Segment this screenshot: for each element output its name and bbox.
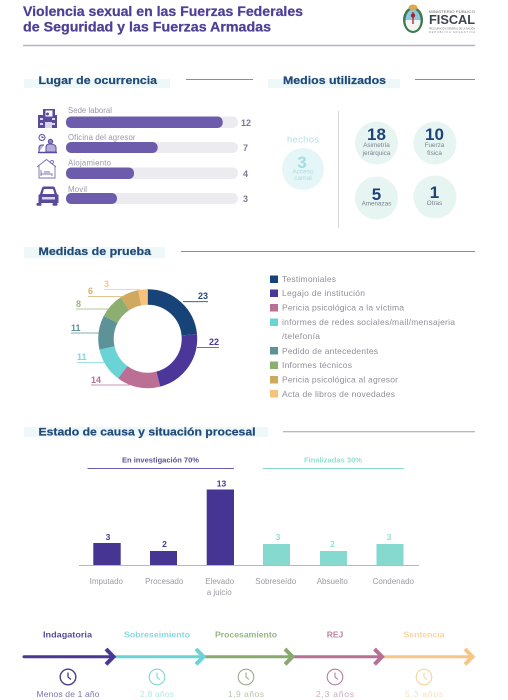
heading: Lugar de ocurrencia — [24, 75, 170, 88]
bar: Movil: 3 — [243, 194, 248, 204]
logo: Ministerio Público Fiscal: PROCURACIÓN GENERAL DE LA NACIÓN — [429, 26, 475, 30]
icon: coat of arms — [403, 4, 423, 33]
bar chart: situación procesal: Elevado — [205, 577, 235, 586]
circle: fuerza fisica — [414, 122, 456, 164]
title: de Seguridad y las Fuerzas Armadas — [23, 20, 271, 34]
stage: Sentencia: Sentencia — [404, 630, 445, 640]
circle: amenazas: 5 — [372, 185, 381, 204]
bar chart: situación procesal: Imputado — [90, 577, 124, 586]
bar chart: situación procesal: 3 — [106, 532, 111, 542]
legend: Pericia psicológica a la víctima — [282, 302, 404, 312]
group header: en investigacion: En investigación 70% — [122, 456, 200, 464]
group header: finalizadas: Finalizadas 30% — [304, 456, 363, 464]
donut value labels: 22 — [209, 337, 219, 347]
legend: /telefonía — [282, 331, 320, 341]
bar: Alojamiento — [66, 158, 248, 179]
legend — [270, 274, 455, 399]
bar: Sede laboral — [66, 106, 251, 128]
legend: informes de redes sociales/mail/mensajeria — [282, 317, 455, 327]
stage: Indagatoria: Menos de 1 año — [36, 689, 100, 699]
donut value labels: 3 — [104, 279, 109, 289]
bar chart: situación procesal: Procesado — [145, 577, 184, 586]
stage: Indagatoria: Indagatoria — [43, 630, 92, 640]
stage: Sobreseimiento: 2,8 años — [140, 689, 174, 699]
stage: Sobreseimiento — [124, 630, 190, 699]
bar: Alojamiento: 4 — [243, 169, 248, 179]
circle: amenazas — [355, 176, 398, 220]
donut value labels: 23 — [198, 291, 208, 301]
bar: Movil: Movil — [68, 185, 87, 194]
icon: car — [36, 186, 58, 206]
donut value labels: 6 — [88, 286, 93, 296]
circle: acceso carnal: Acceso — [292, 168, 314, 176]
stage: Procesamiento: Procesamiento — [215, 630, 277, 640]
logo: Ministerio Público Fiscal: FISCAL — [429, 13, 475, 27]
donut chart — [71, 279, 219, 385]
legend: Pericia psicológica al agresor — [282, 374, 398, 384]
timeline — [24, 630, 472, 699]
icon: office with clock — [38, 134, 57, 152]
circle: acceso carnal: carnal — [294, 175, 312, 182]
bar: Sede laboral: 12 — [241, 118, 251, 128]
stage: Procesamiento — [215, 630, 277, 699]
bar chart: situación procesal — [79, 456, 419, 597]
circle: otras: Otras — [427, 200, 442, 207]
icon: house — [37, 160, 56, 178]
donut value labels: 14 — [91, 375, 101, 385]
circle: acceso carnal: 3 — [297, 153, 307, 172]
stage: REJ: 2,3 años — [316, 689, 354, 699]
donut value labels — [71, 279, 219, 385]
logo: Ministerio Público Fiscal — [403, 4, 475, 34]
legend: Testimoniales — [282, 274, 336, 284]
bar: Sede laboral: Sede laboral — [68, 106, 112, 115]
heading: Lugar de ocurrencia: Lugar de ocurrencia — [38, 75, 158, 87]
donut value labels: 11 — [77, 352, 87, 362]
icon: office building — [38, 109, 57, 128]
bar chart: situación procesal: Condenado — [373, 577, 415, 586]
circle: fuerza fisica: Fuerza — [425, 142, 445, 149]
bar: Oficina del agresor: 7 — [243, 143, 248, 153]
heading: Medidas de prueba: Medidas de prueba — [38, 246, 152, 258]
stage: REJ: REJ — [327, 630, 344, 640]
circle: otras: 1 — [430, 183, 439, 202]
circle: asimetria jerarquica — [355, 122, 398, 164]
circle: asimetria jerarquica: 18 — [367, 125, 386, 144]
circle: acceso carnal — [282, 148, 324, 190]
bar: Alojamiento: Alojamiento — [68, 158, 112, 168]
stage: Sentencia: 5,3 años — [405, 689, 443, 699]
timeline arrows — [24, 649, 472, 664]
bar chart: situación procesal: 3 — [387, 532, 392, 542]
legend: Pedido de antecedentes — [282, 346, 378, 356]
legend: Informes técnicos — [282, 360, 352, 370]
title: Violencia sexual en las Fuerzas Federales — [23, 4, 303, 19]
legend: Acta de libros de novedades — [282, 389, 395, 399]
stage: Sobreseimiento: Sobreseimiento — [124, 630, 190, 640]
bar: Oficina del agresor — [66, 133, 248, 153]
hechos label: hechos — [287, 134, 319, 146]
title — [23, 4, 303, 34]
bar chart: situación procesal: 3 — [276, 532, 281, 542]
circle: fuerza fisica: 10 — [425, 125, 444, 144]
heading: Medios utilizados — [268, 75, 400, 88]
bar chart: situación procesal: Sobreseído — [255, 577, 297, 586]
legend: Legajo de institución — [282, 288, 365, 298]
panel: medios utilizados — [282, 111, 456, 228]
stage: Procesamiento: 1,9 años — [228, 689, 264, 699]
stage: Sentencia — [404, 630, 445, 699]
stage: REJ — [316, 630, 354, 699]
bar: Oficina del agresor: Oficina del agresor — [68, 133, 136, 142]
stage: Indagatoria — [36, 630, 100, 699]
circle: asimetria jerarquica: jerárquica — [362, 150, 391, 157]
panel: lugar de ocurrencia — [36, 106, 251, 206]
circle: otras — [414, 176, 456, 218]
heading: Estado de causa y situación procesal: Estado de causa y situación procesal — [38, 426, 256, 438]
bar chart: situación procesal: 13 — [217, 478, 226, 488]
bar chart: situación procesal: 2 — [162, 539, 167, 549]
bar chart: situación procesal: Absuelto — [317, 577, 348, 586]
logo: Ministerio Público Fiscal: MINISTERIO PÚBLICO — [429, 9, 475, 14]
circle: asimetria jerarquica: Asimetría — [363, 142, 390, 149]
circle: amenazas: Amenazas — [362, 200, 391, 208]
bar chart: situación procesal: a juicio — [207, 588, 232, 597]
donut value labels: 11 — [71, 323, 81, 333]
logo: Ministerio Público Fiscal: REPÚBLICA ARGENTINA — [429, 31, 475, 34]
donut value labels: 8 — [76, 299, 81, 309]
heading: Medios utilizados: Medios utilizados — [283, 75, 386, 87]
circle: fuerza fisica: física — [427, 150, 442, 157]
bar: Movil — [66, 185, 248, 204]
bar chart: situación procesal: 2 — [330, 539, 335, 549]
